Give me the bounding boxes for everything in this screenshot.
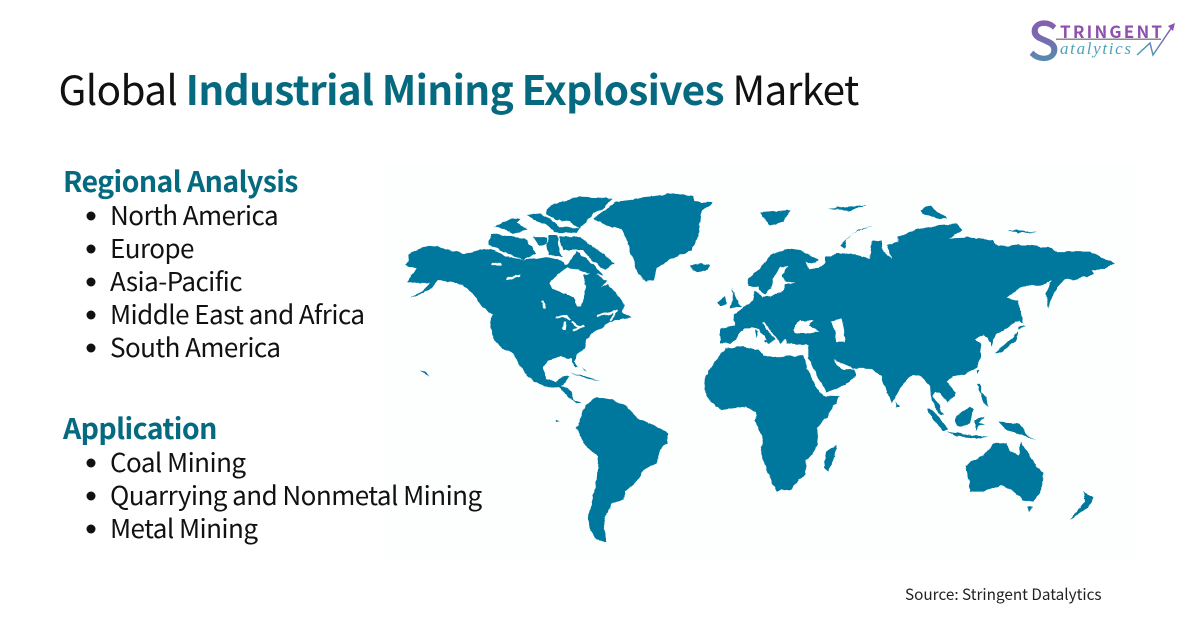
logo: Stringent Datalytics	[1028, 0, 1175, 75]
title: Global Industrial Mining Explosives Market	[58, 58, 859, 117]
heading: regional analysis: Regional Analysis	[63, 160, 298, 201]
heading: application: Application	[62, 407, 217, 448]
list: regions	[86, 196, 364, 365]
Caribbean and Pacific islands	[420, 367, 600, 422]
Eurasia	[720, 223, 1115, 415]
Greenland	[593, 193, 713, 282]
Asian islands	[755, 302, 1037, 440]
Australia	[965, 442, 1043, 502]
inland seas	[793, 318, 853, 370]
world map	[405, 193, 1115, 542]
list: regions: Asia-Pacific	[110, 262, 242, 299]
list: regions: North America	[110, 196, 278, 233]
panel: application	[62, 407, 482, 546]
lakes and gulfs	[492, 264, 617, 372]
list: applications: Metal Mining	[110, 509, 258, 546]
Britain and Ireland	[718, 287, 742, 308]
logo: Stringent Datalytics: S	[1028, 0, 1059, 75]
map: Americas and Greenland	[405, 193, 713, 542]
Arctic Eurasian islands	[760, 205, 1037, 248]
Iceland	[690, 263, 710, 273]
Arctic islands	[488, 197, 615, 275]
map: Eurasia, Africa and Oceania	[704, 205, 1115, 520]
Africa	[704, 347, 840, 492]
Tasmania and New Zealand	[1027, 492, 1093, 520]
list: regions: Europe	[110, 229, 194, 266]
South America	[577, 397, 668, 542]
list: applications	[86, 443, 482, 546]
source note: Source: Stringent Datalytics	[905, 583, 1102, 605]
logo: Stringent Datalytics: atalytics	[1060, 39, 1131, 58]
Madagascar	[824, 445, 837, 472]
list: regions: Middle East and Africa	[110, 295, 364, 332]
panel: regional analysis	[63, 160, 364, 365]
list: applications: Quarrying and Nonmetal Mining	[110, 476, 482, 513]
list: regions: South America	[110, 328, 280, 365]
map background panel	[385, 165, 1135, 560]
logo: Stringent Datalytics: TRINGENT	[1060, 18, 1162, 43]
list: applications: Coal Mining	[110, 443, 246, 480]
North America	[405, 246, 632, 404]
